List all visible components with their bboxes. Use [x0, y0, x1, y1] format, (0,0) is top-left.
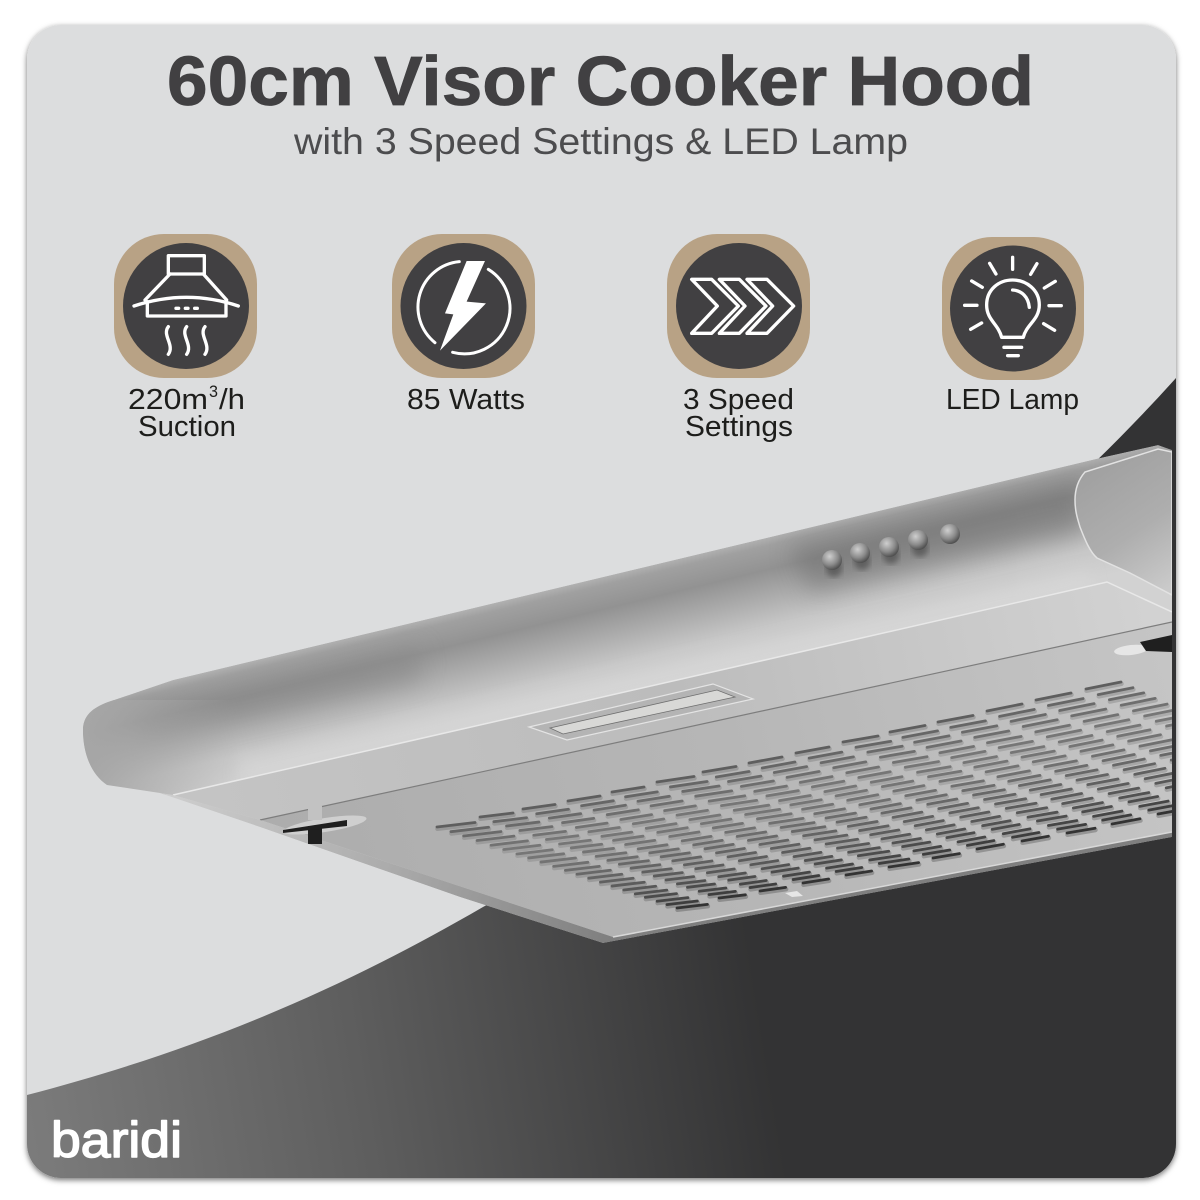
icon: cooker hood [114, 234, 257, 378]
label: 220m3/h suction: 3 [209, 382, 218, 401]
hood front rail [83, 445, 1172, 943]
arrow mark [785, 891, 803, 897]
icon: light bulb [942, 237, 1084, 380]
dark curved background shape [27, 378, 1176, 1178]
feature: watts [392, 234, 535, 416]
control buttons [822, 524, 960, 577]
rail shading [83, 478, 1090, 795]
subtitle: with 3 Speed Settings & LED Lamp [293, 121, 908, 162]
label: 3 speed settings: Settings [685, 411, 793, 443]
feature: suction [114, 234, 257, 443]
front edge strip [107, 785, 1172, 943]
product: cooker hood [83, 445, 1200, 943]
label: 3 speed settings: 3 Speed [683, 384, 794, 416]
title: 60cm Visor Cooker Hood [167, 42, 1034, 120]
vent slots [437, 682, 1200, 910]
icon: chevrons [667, 234, 810, 378]
visor band [176, 600, 1036, 820]
label: 220m3/h suction: 220m [128, 384, 208, 416]
light window [529, 684, 753, 740]
end cap [1075, 449, 1172, 595]
icon: lightning bolt [392, 234, 535, 378]
logo: baridi [51, 1112, 182, 1168]
right clip [1114, 635, 1172, 657]
label: 85 watts: 85 Watts [407, 384, 525, 416]
label: 220m3/h suction: Suction [138, 411, 236, 443]
left clip [282, 806, 368, 844]
label: 220m3/h suction [128, 382, 245, 443]
label: 3 speed settings [683, 384, 794, 443]
label: 220m3/h suction: /h [219, 384, 245, 416]
feature: speed settings [667, 234, 810, 443]
feature: led lamp [942, 237, 1084, 416]
label: led lamp: LED Lamp [946, 384, 1079, 416]
filter panel [260, 622, 1172, 937]
